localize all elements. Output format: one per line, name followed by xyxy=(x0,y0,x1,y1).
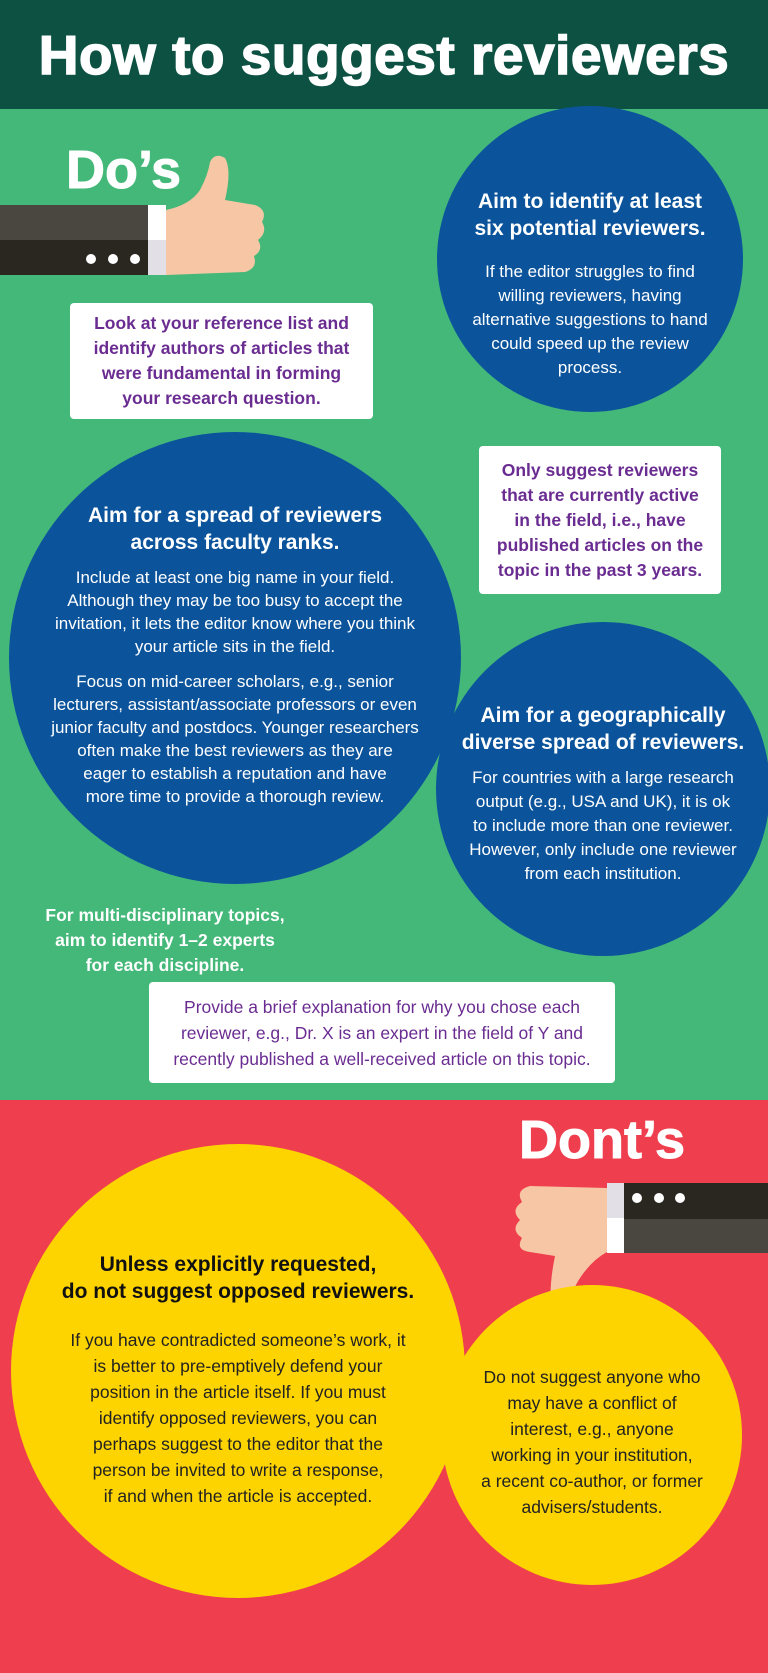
box: currently active: topic in the past 3 years. xyxy=(498,560,702,580)
box: currently active: published articles on the xyxy=(497,534,703,554)
circle: opposed reviewers: identify opposed reviewers, you can xyxy=(99,1408,377,1428)
circle: conflict of interest: interest, e.g., anyone xyxy=(510,1419,674,1439)
circle: conflict of interest xyxy=(442,1285,742,1585)
box: currently active: Only suggest reviewers xyxy=(502,460,698,480)
circle: conflict of interest: a recent co-author, or former xyxy=(481,1471,703,1491)
circle: geographic: However, only include one reviewer xyxy=(469,840,737,859)
circle: faculty ranks: often make the best reviewers as they are xyxy=(77,741,393,760)
icon: thumbs down xyxy=(516,1183,768,1291)
circle: opposed reviewers: perhaps suggest to the editor that the xyxy=(93,1434,383,1454)
circle: faculty ranks: more time to provide a thorough review. xyxy=(86,787,384,806)
circle: conflict of interest: may have a conflict of xyxy=(507,1393,677,1413)
circle: faculty ranks: Focus on mid-career scholars, e.g., senior xyxy=(76,672,394,691)
donts section xyxy=(0,1100,768,1673)
box: explanation: recently published a well-received article on this topic. xyxy=(173,1048,591,1068)
circle: faculty ranks: eager to establish a reputation and have xyxy=(83,764,387,783)
text: multi-disciplinary: aim to identify 1–2 experts xyxy=(55,930,275,950)
circle: faculty ranks xyxy=(9,432,461,884)
circle: conflict of interest: Do not suggest anyone who xyxy=(484,1367,700,1387)
donts label: Dont’s xyxy=(519,1110,685,1170)
circle: geographic: Aim for a geographically xyxy=(480,704,726,727)
circle: conflict of interest: advisers/students. xyxy=(521,1497,663,1517)
text: multi-disciplinary xyxy=(45,905,285,975)
circle: geographic: diverse spread of reviewers. xyxy=(462,731,744,754)
box: currently active: that are currently active xyxy=(501,484,699,504)
circle: faculty ranks: Aim for a spread of reviewers xyxy=(88,504,382,527)
circle: faculty ranks: junior faculty and postdocs. Younger researchers xyxy=(51,718,419,737)
circle: six reviewers: alternative suggestions to hand xyxy=(472,310,708,329)
text: multi-disciplinary: for each discipline. xyxy=(86,955,244,975)
dos label: Do’s xyxy=(66,140,181,200)
circle: faculty ranks: across faculty ranks. xyxy=(131,531,339,554)
circle: opposed reviewers: Unless explicitly requested, xyxy=(100,1253,376,1276)
circle: conflict of interest: working in your institution, xyxy=(491,1445,693,1465)
box: explanation xyxy=(149,982,615,1083)
box: explanation: reviewer, e.g., Dr. X is an expert in the field of Y and xyxy=(181,1022,583,1042)
circle: geographic: For countries with a large research xyxy=(472,768,734,787)
circle: geographic: from each institution. xyxy=(525,864,681,883)
box: reference list: your research question. xyxy=(122,388,321,408)
circle: geographic: to include more than one reviewer. xyxy=(473,816,733,835)
title: How to suggest reviewers xyxy=(39,24,729,86)
icon: thumbs up xyxy=(0,156,264,275)
circle: six reviewers: willing reviewers, having xyxy=(498,286,682,305)
circle: opposed reviewers: if and when the article is accepted. xyxy=(104,1486,372,1506)
circle: faculty ranks: Although they may be too busy to accept the xyxy=(67,591,403,610)
circle: six reviewers: Aim to identify at least xyxy=(478,190,702,213)
box: reference list: were fundamental in forming xyxy=(102,363,341,383)
circle: opposed reviewers xyxy=(11,1144,465,1598)
header xyxy=(0,0,768,109)
box: reference list: Look at your reference list and xyxy=(94,313,349,333)
box: currently active xyxy=(479,446,721,594)
circle: geographic xyxy=(436,622,768,956)
circle: six reviewers: could speed up the review xyxy=(491,334,689,353)
circle: opposed reviewers: person be invited to write a response, xyxy=(93,1460,383,1480)
circle: six reviewers: process. xyxy=(558,358,622,377)
circle: geographic: output (e.g., USA and UK), it is ok xyxy=(476,792,730,811)
circle: six reviewers: six potential reviewers. xyxy=(474,217,706,240)
circle: faculty ranks: invitation, it lets the editor know where you think xyxy=(55,614,415,633)
text: multi-disciplinary: For multi-disciplinary topics, xyxy=(45,905,285,925)
circle: faculty ranks: lecturers, assistant/associate professors or even xyxy=(53,695,417,714)
circle: faculty ranks: Include at least one big name in your field. xyxy=(76,568,394,587)
circle: opposed reviewers: position in the article itself. If you must xyxy=(90,1382,386,1402)
box: reference list xyxy=(70,303,373,419)
circle: opposed reviewers: do not suggest opposed reviewers. xyxy=(62,1280,414,1303)
box: currently active: in the field, i.e., have xyxy=(514,510,686,530)
circle: opposed reviewers: is better to pre-emptively defend your xyxy=(94,1356,382,1376)
circle: six reviewers xyxy=(437,106,743,412)
circle: six reviewers: If the editor struggles to find xyxy=(485,262,695,281)
circle: opposed reviewers: If you have contradicted someone’s work, it xyxy=(70,1330,406,1350)
circle: faculty ranks: your article sits in the field. xyxy=(135,637,335,656)
box: reference list: identify authors of articles that xyxy=(94,338,349,358)
box: explanation: Provide a brief explanation for why you chose each xyxy=(184,996,580,1016)
